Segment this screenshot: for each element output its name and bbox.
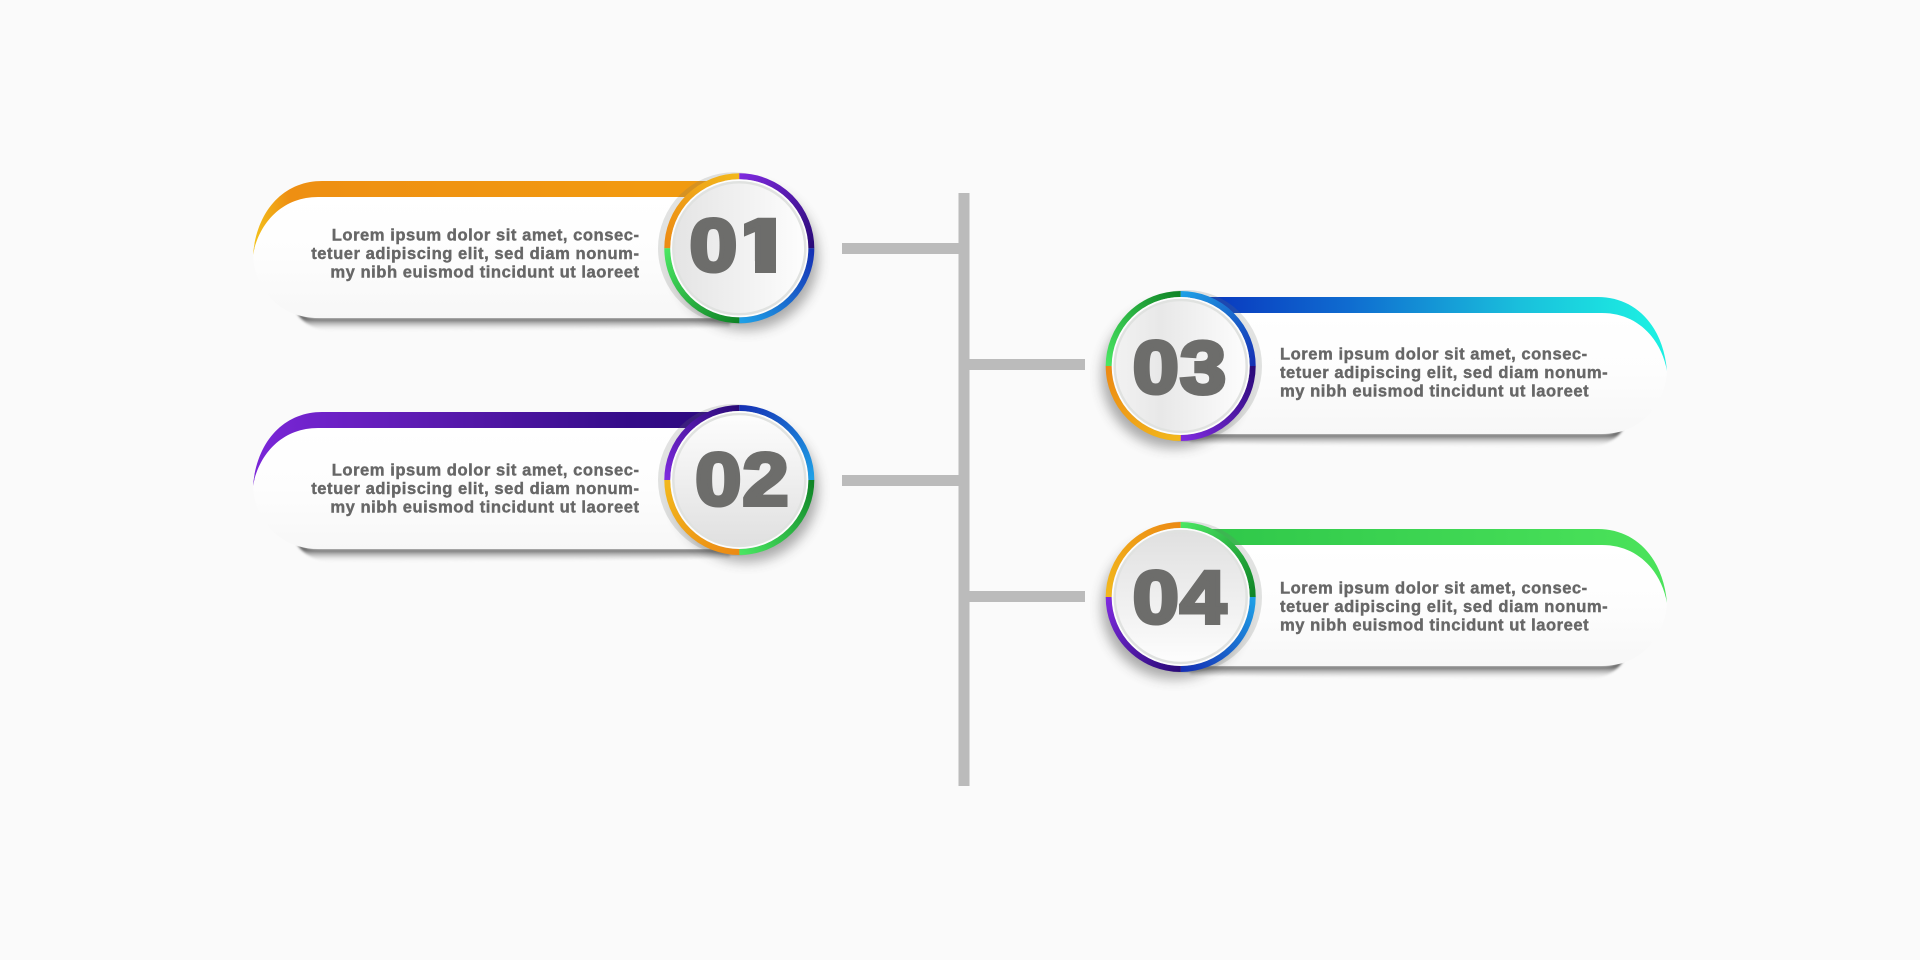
text block 01: tetuer adipiscing elit, sed diam nonum- xyxy=(311,244,640,263)
panel: step 01 xyxy=(253,172,818,332)
number 01: 0 xyxy=(690,204,738,287)
vertical spine xyxy=(958,193,970,786)
branch to step 03 xyxy=(968,359,1085,370)
text block 01: Lorem ipsum dolor sit amet, consec- xyxy=(332,226,640,244)
number 01 xyxy=(690,217,776,274)
text block 04: Lorem ipsum dolor sit amet, consec- xyxy=(1280,578,1588,598)
text block 03: my nibh euismod tincidunt ut laoreet xyxy=(1280,381,1589,400)
number 03: 03 xyxy=(1133,326,1227,409)
badge ring 03 xyxy=(1109,294,1253,438)
card 04 shape xyxy=(1102,521,1667,680)
branch to step 01 xyxy=(842,243,960,254)
card 03 shape xyxy=(1102,290,1667,448)
text block 02: tetuer adipiscing elit, sed diam nonum- xyxy=(311,479,640,498)
text block 02: Lorem ipsum dolor sit amet, consec- xyxy=(332,461,640,480)
badge ring 02 xyxy=(667,408,811,552)
text block 04: my nibh euismod tincidunt ut laoreet xyxy=(1280,615,1589,634)
branch to step 04 xyxy=(968,591,1085,602)
card 01 shape xyxy=(253,172,818,332)
panel: step 03 xyxy=(1102,290,1667,448)
connector tree xyxy=(842,193,1085,786)
badge ring 01 xyxy=(667,176,811,320)
text block 03: tetuer adipiscing elit, sed diam nonum- xyxy=(1280,363,1608,382)
badge ring 04 xyxy=(1109,525,1253,669)
number 04: 04 xyxy=(1133,556,1227,639)
number 02: 02 xyxy=(695,438,790,521)
text block 04: tetuer adipiscing elit, sed diam nonum- xyxy=(1280,597,1608,616)
text block 02: my nibh euismod tincidunt ut laoreet xyxy=(330,497,640,516)
card 02 shape xyxy=(253,404,818,563)
text block 03: Lorem ipsum dolor sit amet, consec- xyxy=(1280,344,1588,364)
branch to step 02 xyxy=(842,475,960,486)
panel: step 02 xyxy=(253,404,818,563)
panel: step 04 xyxy=(1102,521,1667,680)
number 01: 1 xyxy=(732,204,795,287)
text block 01: my nibh euismod tincidunt ut laoreet xyxy=(330,262,640,281)
